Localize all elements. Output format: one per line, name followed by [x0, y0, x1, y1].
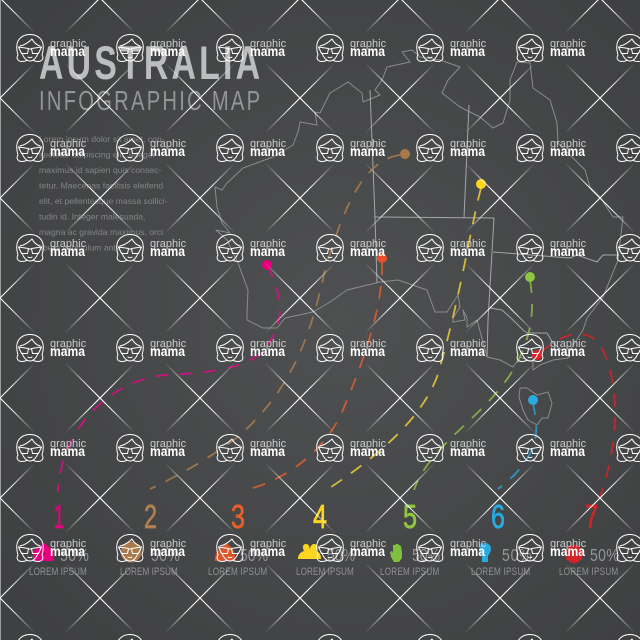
- watermark grid: graphic: [250, 38, 287, 50]
- legend item 4: [296, 498, 355, 578]
- watermark grid: mama: [150, 143, 185, 159]
- icon: light bulb: [479, 543, 491, 562]
- watermark grid: mama: [550, 43, 585, 59]
- icon: people: [298, 544, 321, 559]
- watermark grid: mama: [350, 43, 385, 59]
- watermark grid: graphic: [350, 138, 387, 150]
- legend item 3: 50%: [240, 545, 268, 565]
- watermark grid: mama: [150, 243, 185, 259]
- watermark grid: mama: [350, 543, 385, 559]
- watermark grid: graphic: [550, 238, 587, 250]
- watermark grid: mama: [550, 443, 585, 459]
- watermark grid: graphic: [350, 438, 387, 450]
- watermark grid: graphic: [550, 38, 587, 50]
- watermark grid: mama: [150, 43, 185, 59]
- watermark grid: graphic: [50, 438, 87, 450]
- watermark grid: graphic: [150, 238, 187, 250]
- title: INFOGRAPHIC MAP: [39, 86, 260, 117]
- watermark grid: graphic: [450, 538, 487, 550]
- watermark grid: mama: [250, 243, 285, 259]
- route 1 magenta: [58, 260, 280, 492]
- text block: intro: tetur. Maecenas facilisis eleifend: [39, 180, 163, 190]
- watermark grid: graphic: [550, 538, 587, 550]
- watermark grid: mama: [150, 543, 185, 559]
- watermark grid: graphic: [250, 238, 287, 250]
- text block: intro: libero vehiculum ante.: [39, 242, 123, 252]
- text block: intro: magna ac gravida maximus, orci: [39, 227, 163, 237]
- watermark grid: mama: [550, 143, 585, 159]
- watermark grid: mama: [350, 443, 385, 459]
- icon: gear: [566, 546, 582, 562]
- watermark grid: mama: [450, 443, 485, 459]
- watermark grid: graphic: [50, 338, 87, 350]
- legend item 5: LOREM IPSUM: [380, 566, 439, 578]
- legend item 2: 50%: [151, 545, 180, 565]
- text block: intro: maximus id sapien quis consec-: [39, 165, 161, 175]
- watermark grid: mama: [150, 343, 185, 359]
- watermark grid: mama: [50, 143, 85, 159]
- legend item 1: LOREM IPSUM: [29, 566, 87, 578]
- text block: intro: [39, 134, 168, 252]
- watermark grid: graphic: [350, 538, 387, 550]
- legend item 3: [208, 498, 268, 578]
- legend item 1: 1: [54, 498, 64, 535]
- watermark grid: mama: [450, 43, 485, 59]
- watermark grid: graphic: [250, 338, 287, 350]
- Tasmania: [519, 388, 552, 425]
- watermark grid: graphic: [150, 138, 187, 150]
- legend item 7: LOREM IPSUM: [559, 566, 618, 578]
- icon: head: [120, 542, 142, 562]
- legend item 7: 50%: [590, 545, 619, 565]
- text block: intro: sectetur adipiscing elit. Integer: [39, 150, 156, 160]
- watermark grid: graphic: [450, 438, 487, 450]
- watermark grid: mama: [250, 343, 285, 359]
- legend item 2: LOREM IPSUM: [120, 566, 178, 578]
- text block: intro: Lorem ipsum dolor sit amet, con-: [39, 134, 165, 144]
- watermark grid: graphic: [550, 138, 587, 150]
- route 2 brown: [150, 149, 410, 489]
- watermark grid: graphic: [350, 238, 387, 250]
- watermark grid: mama: [350, 143, 385, 159]
- watermark grid: graphic: [150, 38, 187, 50]
- legend item 2: 2: [144, 498, 157, 535]
- legend item 6: LOREM IPSUM: [471, 566, 530, 578]
- legend item 1: 50%: [60, 545, 89, 565]
- watermark grid: graphic: [550, 438, 587, 450]
- watermark grid: mama: [50, 543, 85, 559]
- watermark grid: graphic: [250, 438, 287, 450]
- watermark grid: mama: [50, 243, 85, 259]
- mainland coast: [215, 50, 623, 370]
- watermark grid: graphic: [550, 338, 587, 350]
- map of Australia: [215, 50, 623, 425]
- watermark grid: mama: [550, 543, 585, 559]
- legend item 4: 50%: [327, 545, 355, 565]
- legend item 7: 7: [585, 498, 598, 535]
- watermark grid: graphic: [250, 138, 287, 150]
- watermark grid: mama: [350, 343, 385, 359]
- text block: intro: elit, et pellentesque massa sollici-: [39, 196, 168, 206]
- watermark grid: graphic: [350, 38, 387, 50]
- watermark grid: mama: [250, 43, 285, 59]
- watermark grid: graphic: [150, 438, 187, 450]
- watermark grid: mama: [450, 343, 485, 359]
- legend item 5: 5: [403, 498, 417, 535]
- watermark grid: mama: [550, 243, 585, 259]
- watermark grid: graphic: [350, 338, 387, 350]
- route 7 red: [532, 334, 615, 497]
- title: [39, 37, 260, 117]
- legend item 5: [380, 498, 440, 578]
- watermark grid: mama: [350, 243, 385, 259]
- watermark grid: mama: [50, 343, 85, 359]
- watermark grid: mama: [50, 443, 85, 459]
- watermark grid: graphic: [250, 538, 287, 550]
- watermark grid: mama: [250, 443, 285, 459]
- watermark grid: mama: [450, 243, 485, 259]
- watermark grid: graphic: [450, 138, 487, 150]
- legend item 2: [120, 498, 180, 578]
- icon: hand: [390, 544, 402, 562]
- watermark grid: mama: [150, 443, 185, 459]
- watermark grid: graphic: [50, 38, 87, 50]
- watermark grid: mama: [450, 543, 485, 559]
- watermark grid: graphic: [150, 338, 187, 350]
- legend item 6: 50%: [502, 545, 532, 565]
- icon: house: [33, 543, 54, 561]
- watermark grid: graphic: [50, 238, 87, 250]
- watermark grid: mama: [250, 543, 285, 559]
- icon: flame: [215, 543, 235, 561]
- route 4 yellow: [325, 179, 486, 491]
- watermark grid: graphic: [450, 238, 487, 250]
- legend item 4: LOREM IPSUM: [296, 566, 354, 578]
- legend item 7: [559, 498, 619, 578]
- watermark grid: mama: [550, 343, 585, 359]
- legend item 5: 50%: [412, 545, 440, 565]
- watermark grid: graphic: [50, 538, 87, 550]
- watermark grid: mama: [250, 143, 285, 159]
- legend item 6: [471, 498, 532, 578]
- watermark grid: graphic: [450, 338, 487, 350]
- route 3 orange: [245, 253, 387, 490]
- watermark grid: mama: [50, 43, 85, 59]
- legend item 3: LOREM IPSUM: [208, 566, 267, 578]
- route 6 blue: [498, 395, 538, 489]
- watermark grid: mama: [450, 143, 485, 159]
- legend item 3: 3: [231, 498, 245, 535]
- legend item 1: [29, 498, 89, 578]
- text block: intro: tudin id. Integer malesuada,: [39, 212, 145, 222]
- watermark grid: graphic: [50, 138, 87, 150]
- legend item 4: 4: [313, 498, 327, 535]
- title: AUSTRALIA: [39, 37, 260, 89]
- watermark grid: graphic: [150, 538, 187, 550]
- legend item 6: 6: [491, 498, 505, 535]
- route 5 green: [414, 272, 535, 490]
- state borders: [370, 90, 618, 357]
- watermark grid: graphic: [450, 38, 487, 50]
